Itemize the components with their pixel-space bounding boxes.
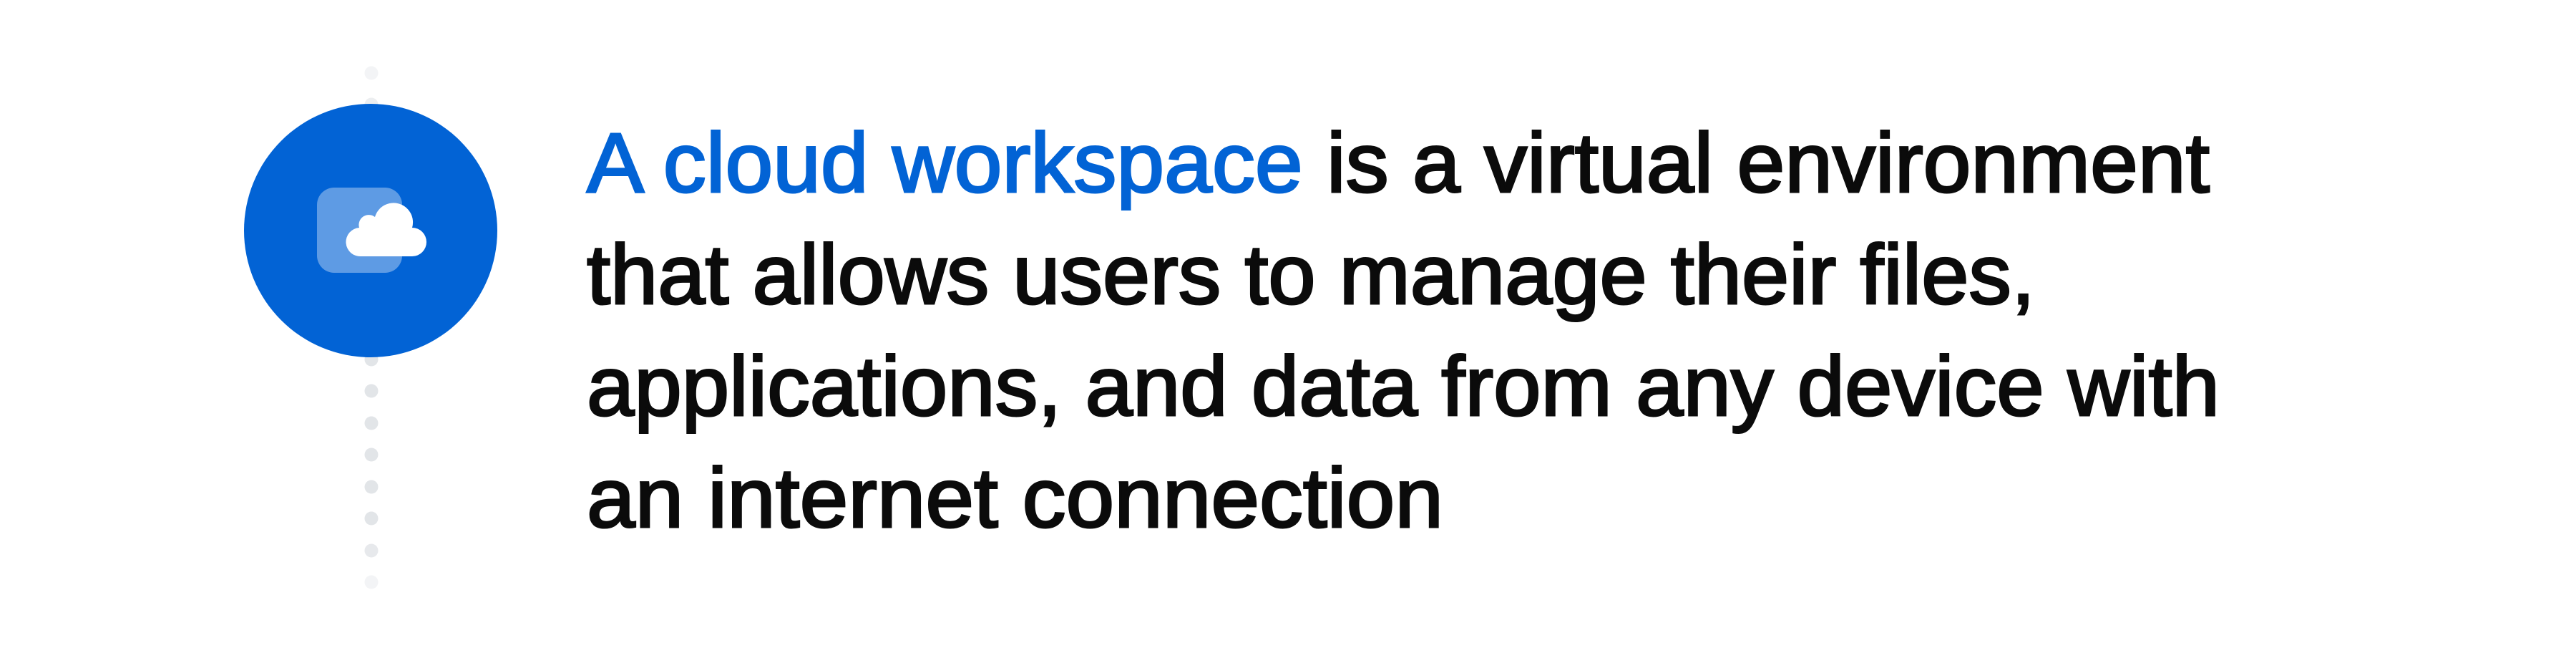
text line 2: that allows users to manage their files, (587, 228, 2035, 322)
icon: blue circle with cloud workspace (244, 104, 497, 357)
text line 3: applications, and data from any device with (587, 339, 2220, 434)
dotted vertical line (365, 66, 378, 589)
text block: definition (587, 116, 2220, 546)
icon: cloud (346, 203, 426, 256)
text line 4: an internet connection (587, 451, 1443, 546)
text line 1: A cloud workspace is a virtual environment (587, 116, 2210, 211)
icon: window square (317, 188, 402, 273)
